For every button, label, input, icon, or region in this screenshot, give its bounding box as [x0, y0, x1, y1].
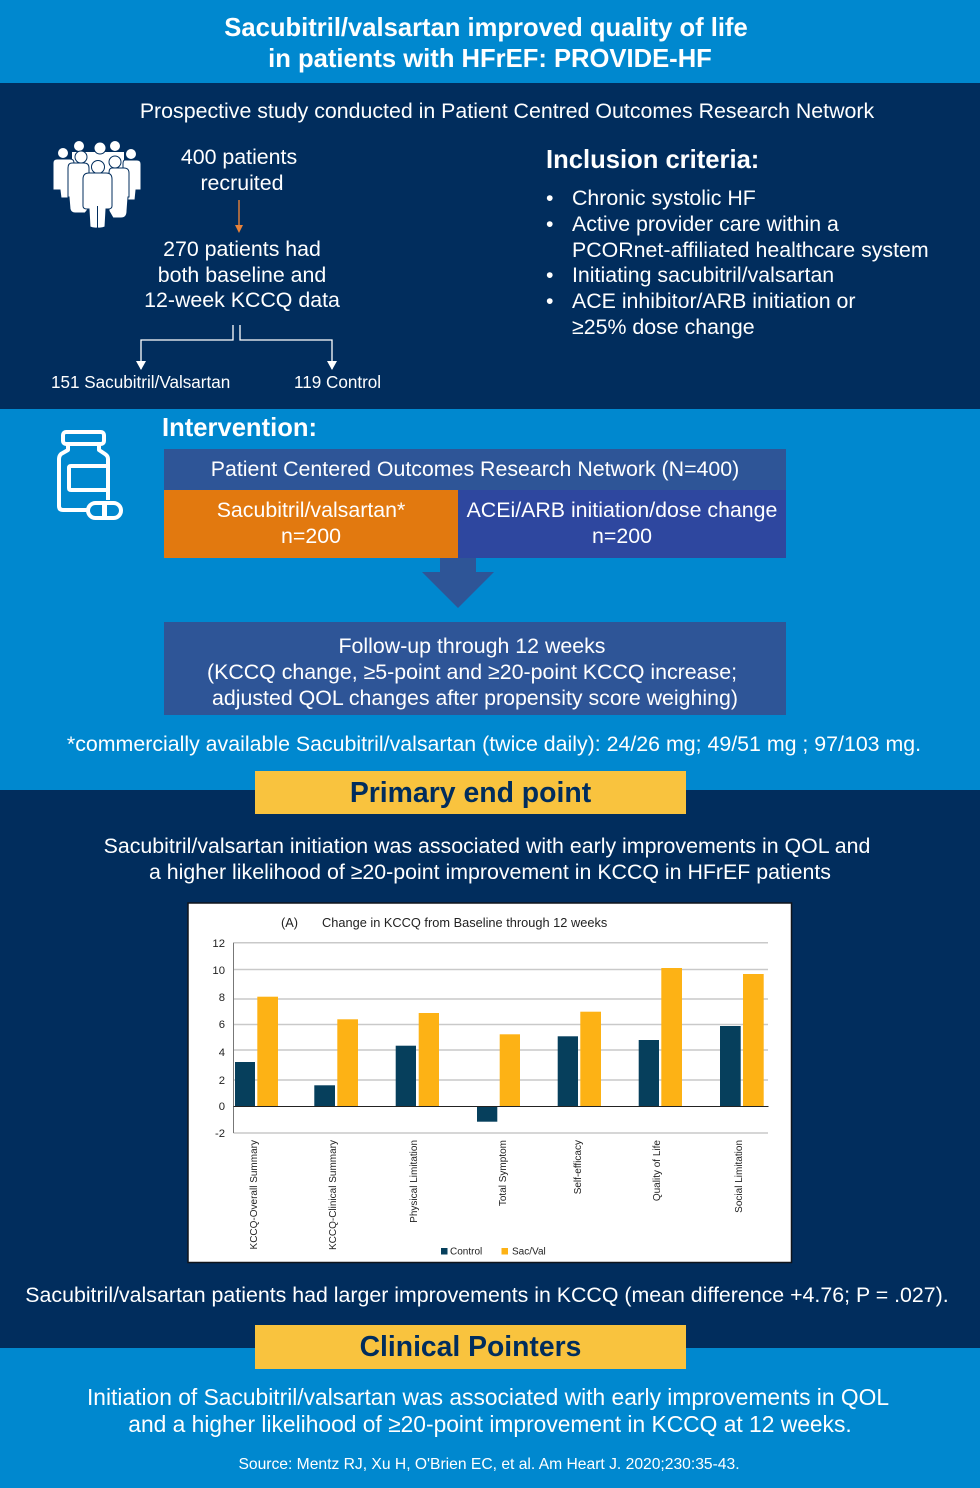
result summary — [104, 834, 870, 884]
header band — [0, 0, 980, 83]
panel: clinical pointers — [0, 1348, 980, 1488]
dosage footnote: *commercially available Sacubitril/valsartan (twice daily): 24/26 mg; 49/51 mg ; 97/103 mg. — [67, 732, 921, 756]
study heading: Prospective study conducted in Patient Centred Outcomes Research Network — [140, 99, 874, 123]
inclusion criteria list: PCORnet-affiliated healthcare system — [572, 238, 929, 262]
category labels: Physical Limitation — [409, 1140, 420, 1223]
y axis labels: 0 — [219, 1101, 225, 1113]
legend: Sac/Val — [512, 1246, 546, 1258]
title: Sacubitril/valsartan improved quality of life — [224, 14, 748, 42]
y axis labels: 8 — [219, 992, 225, 1004]
result summary: a higher likelihood of ≥20-point improvement in KCCQ in HFrEF patients — [149, 860, 831, 884]
analysed text — [144, 237, 340, 312]
inclusion criteria list: ACE inhibitor/ARB initiation or — [572, 289, 856, 313]
clinical pointers text — [87, 1384, 889, 1437]
analysed text: 270 patients had — [163, 237, 321, 261]
bar chart — [187, 902, 792, 1264]
sacubitril arm box: n=200 — [281, 524, 341, 548]
inclusion criteria list — [546, 186, 929, 339]
category labels — [249, 1140, 745, 1250]
comparator arm box: n=200 — [592, 524, 652, 548]
mean difference statement: Sacubitril/valsartan patients had larger improvements in KCCQ (mean difference +4.76; P = .027). — [25, 1283, 949, 1307]
source: Source: Mentz RJ, Xu H, O'Brien EC, et al. Am Heart J. 2020;230:35-43. — [238, 1456, 740, 1473]
follow-up box: (KCCQ change, ≥5-point and ≥20-point KCCQ increase; — [207, 660, 737, 684]
heading: clinical pointers: Clinical Pointers — [360, 1330, 581, 1362]
arrow: to follow-up — [422, 558, 494, 608]
icon: patient group — [54, 141, 140, 228]
inclusion criteria list: • — [546, 289, 553, 313]
y axis labels: 10 — [212, 965, 225, 977]
follow-up box: Follow-up through 12 weeks — [339, 634, 605, 658]
category labels: Quality of Life — [652, 1140, 663, 1201]
analysed text: both baseline and — [158, 262, 326, 286]
follow-up box — [164, 622, 786, 715]
recruited text: recruited — [200, 171, 283, 195]
y axis labels: -2 — [215, 1128, 225, 1140]
intervention heading: Intervention: — [162, 414, 317, 442]
recruited text: 400 patients — [181, 145, 297, 169]
arrow: recruited to analysed — [235, 200, 243, 233]
network box: Patient Centered Outcomes Research Network (N=400) — [211, 457, 739, 481]
y axis labels: 6 — [219, 1019, 225, 1031]
inclusion criteria heading: Inclusion criteria: — [546, 146, 759, 174]
title: in patients with HFrEF: PROVIDE-HF — [268, 45, 712, 73]
y axis labels: 2 — [219, 1075, 225, 1087]
inclusion criteria list: Active provider care within a — [572, 212, 839, 236]
category labels: KCCQ-Overall Summary — [249, 1140, 260, 1249]
chart title: (A) — [281, 915, 298, 930]
panel: primary end point — [0, 790, 980, 1348]
chart title: Change in KCCQ from Baseline through 12 weeks — [322, 915, 607, 930]
heading: primary end point: Primary end point — [350, 777, 591, 809]
inclusion criteria list: • — [546, 212, 553, 236]
category labels: Social Limitation — [734, 1140, 745, 1213]
group label: control: 119 Control — [294, 372, 381, 392]
panel: intervention — [0, 409, 980, 790]
recruited text — [181, 145, 297, 195]
category labels: Total Symptom — [498, 1140, 509, 1206]
category labels: KCCQ-Clinical Summary — [328, 1140, 339, 1250]
group label: sacubitril/valsartan: 151 Sacubitril/Valsartan — [51, 372, 230, 392]
inclusion criteria list: Chronic systolic HF — [572, 186, 756, 210]
control bars — [235, 1026, 741, 1122]
sacubitril arm box — [164, 490, 458, 558]
sacubitril arm box: Sacubitril/valsartan* — [217, 498, 405, 522]
comparator arm box — [458, 490, 786, 558]
inclusion criteria list: Initiating sacubitril/valsartan — [572, 263, 834, 287]
clinical pointers text: Initiation of Sacubitril/valsartan was associated with early improvements in QOL — [87, 1384, 889, 1410]
legend — [441, 1246, 546, 1258]
panel: study design — [0, 83, 980, 409]
result summary: Sacubitril/valsartan initiation was associated with early improvements in QOL and — [104, 834, 870, 858]
analysed text: 12-week KCCQ data — [144, 288, 340, 312]
y axis labels: 12 — [212, 938, 225, 950]
inclusion criteria list: • — [546, 186, 553, 210]
arrows: split into groups — [136, 325, 337, 370]
category labels: Self-efficacy — [573, 1140, 584, 1194]
follow-up box: adjusted QOL changes after propensity score weighing) — [212, 686, 738, 710]
icon: pill bottle — [57, 430, 123, 520]
sac/val bars — [257, 968, 764, 1106]
legend: Control — [450, 1246, 482, 1258]
network box — [164, 449, 786, 490]
y axis labels — [212, 938, 225, 1140]
y axis labels: 4 — [219, 1047, 225, 1059]
heading: clinical pointers — [255, 1325, 686, 1369]
comparator arm box: ACEi/ARB initiation/dose change — [467, 498, 777, 522]
inclusion criteria list: • — [546, 263, 553, 287]
title — [224, 14, 748, 73]
inclusion criteria list: ≥25% dose change — [572, 315, 755, 339]
heading: primary end point — [255, 771, 686, 814]
clinical pointers text: and a higher likelihood of ≥20-point improvement in KCCQ at 12 weeks. — [128, 1411, 852, 1437]
